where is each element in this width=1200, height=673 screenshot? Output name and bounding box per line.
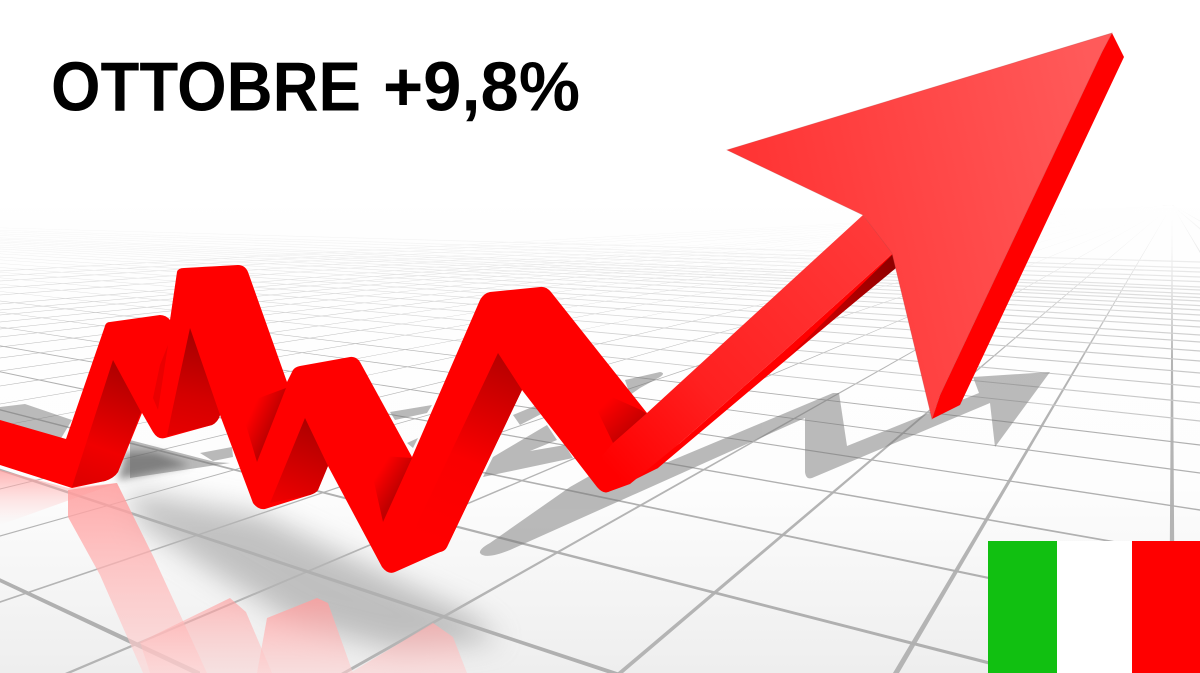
arrow head face <box>727 33 1112 419</box>
title: +9,8% <box>383 48 580 126</box>
red reflection on floor <box>0 470 467 673</box>
shadow of the line on the floor <box>0 372 1050 556</box>
icon: Italian flag <box>988 541 1200 673</box>
near depth lines <box>0 301 1200 673</box>
fold facet five <box>585 385 647 443</box>
dark contact shadow under the line <box>118 452 190 480</box>
fold sliver two <box>153 345 168 410</box>
fold facet four <box>395 353 522 570</box>
radial grid lines <box>0 205 1200 673</box>
line front silhouette <box>0 265 658 573</box>
title: OTTOBRE <box>51 48 361 126</box>
arrow shaft top face <box>590 215 893 492</box>
floor <box>0 208 1200 673</box>
arrow shaft lower band <box>620 253 895 487</box>
fold sliver four <box>368 455 412 522</box>
far depth lines <box>0 228 1200 422</box>
fold facet one <box>72 360 141 487</box>
arrow shaft underside <box>785 254 896 360</box>
fold sliver three <box>240 388 286 462</box>
soft floor shadow <box>125 490 500 650</box>
perspective grid floor <box>0 205 1200 673</box>
red arrow <box>590 33 1124 492</box>
red zigzag line <box>0 265 658 573</box>
fold facet two <box>167 328 220 436</box>
fold facet three <box>270 418 328 503</box>
arrow head side <box>932 33 1124 419</box>
horizon fade <box>0 206 1200 360</box>
